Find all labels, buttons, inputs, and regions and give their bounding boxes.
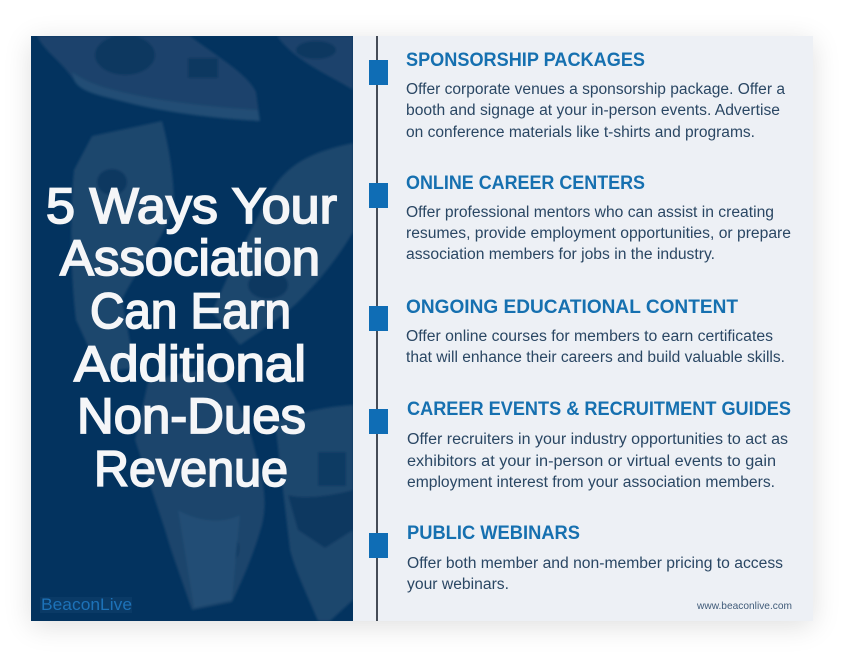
section: public webinars: PUBLIC WEBINARS	[407, 523, 580, 544]
title	[46, 178, 337, 497]
section: online career centers	[406, 173, 791, 263]
title: 5 Ways Your	[46, 178, 337, 234]
panel: title panel with money background	[31, 35, 353, 621]
section: ongoing educational content	[406, 297, 785, 366]
timeline marker 4	[369, 409, 388, 434]
timeline marker 2	[369, 183, 388, 208]
section: ongoing educational content: ONGOING EDUCATIONAL CONTENT	[406, 297, 738, 318]
title: Can Earn	[90, 283, 291, 339]
title: Non-Dues	[77, 388, 306, 444]
section: career events and recruitment guides	[407, 399, 791, 491]
section: career events and recruitment guides: Offer recruiters in your industry opportunities to act as	[407, 431, 788, 448]
title: Additional	[74, 336, 306, 392]
section: sponsorship packages: Offer corporate venues a sponsorship package. Offer a	[406, 81, 785, 98]
section: online career centers: ONLINE CAREER CENTERS	[406, 173, 645, 194]
section: career events and recruitment guides: exhibitors at your in-person or virtual events to gain	[407, 453, 776, 470]
section: career events and recruitment guides: CAREER EVENTS & RECRUITMENT GUIDES	[407, 399, 791, 420]
section: ongoing educational content: that will enhance their careers and build valuable skills.	[406, 349, 785, 366]
section: career events and recruitment guides: employment interest from your association members.	[407, 474, 775, 491]
section: sponsorship packages: booth and signage at your in-person events. Advertise	[406, 102, 780, 119]
section: public webinars	[407, 523, 783, 593]
section: sponsorship packages	[406, 50, 785, 141]
section: sponsorship packages: on conference materials like t-shirts and programs.	[406, 124, 755, 141]
timeline line	[376, 36, 378, 621]
timeline marker 1	[369, 60, 388, 85]
title: Association	[60, 230, 320, 286]
section: public webinars: Offer both member and non-member pricing to access	[407, 555, 783, 572]
section: online career centers: Offer professional mentors who can assist in creating	[406, 204, 774, 221]
title: Revenue	[94, 441, 288, 497]
website url: www.beaconlive.com	[696, 600, 792, 612]
section: sponsorship packages: SPONSORSHIP PACKAGES	[406, 50, 645, 71]
timeline marker 5	[369, 533, 388, 558]
timeline marker 3	[369, 306, 388, 331]
section: online career centers: resumes, provide employment opportunities, or prepare	[406, 225, 791, 242]
section: public webinars: your webinars.	[407, 576, 509, 593]
section: online career centers: association members for jobs in the industry.	[406, 246, 715, 263]
section: ongoing educational content: Offer online courses for members to earn certificates	[406, 328, 773, 345]
image: falling dollar bills	[37, 35, 353, 621]
logo: BeaconLive: BeaconLive	[41, 595, 132, 614]
